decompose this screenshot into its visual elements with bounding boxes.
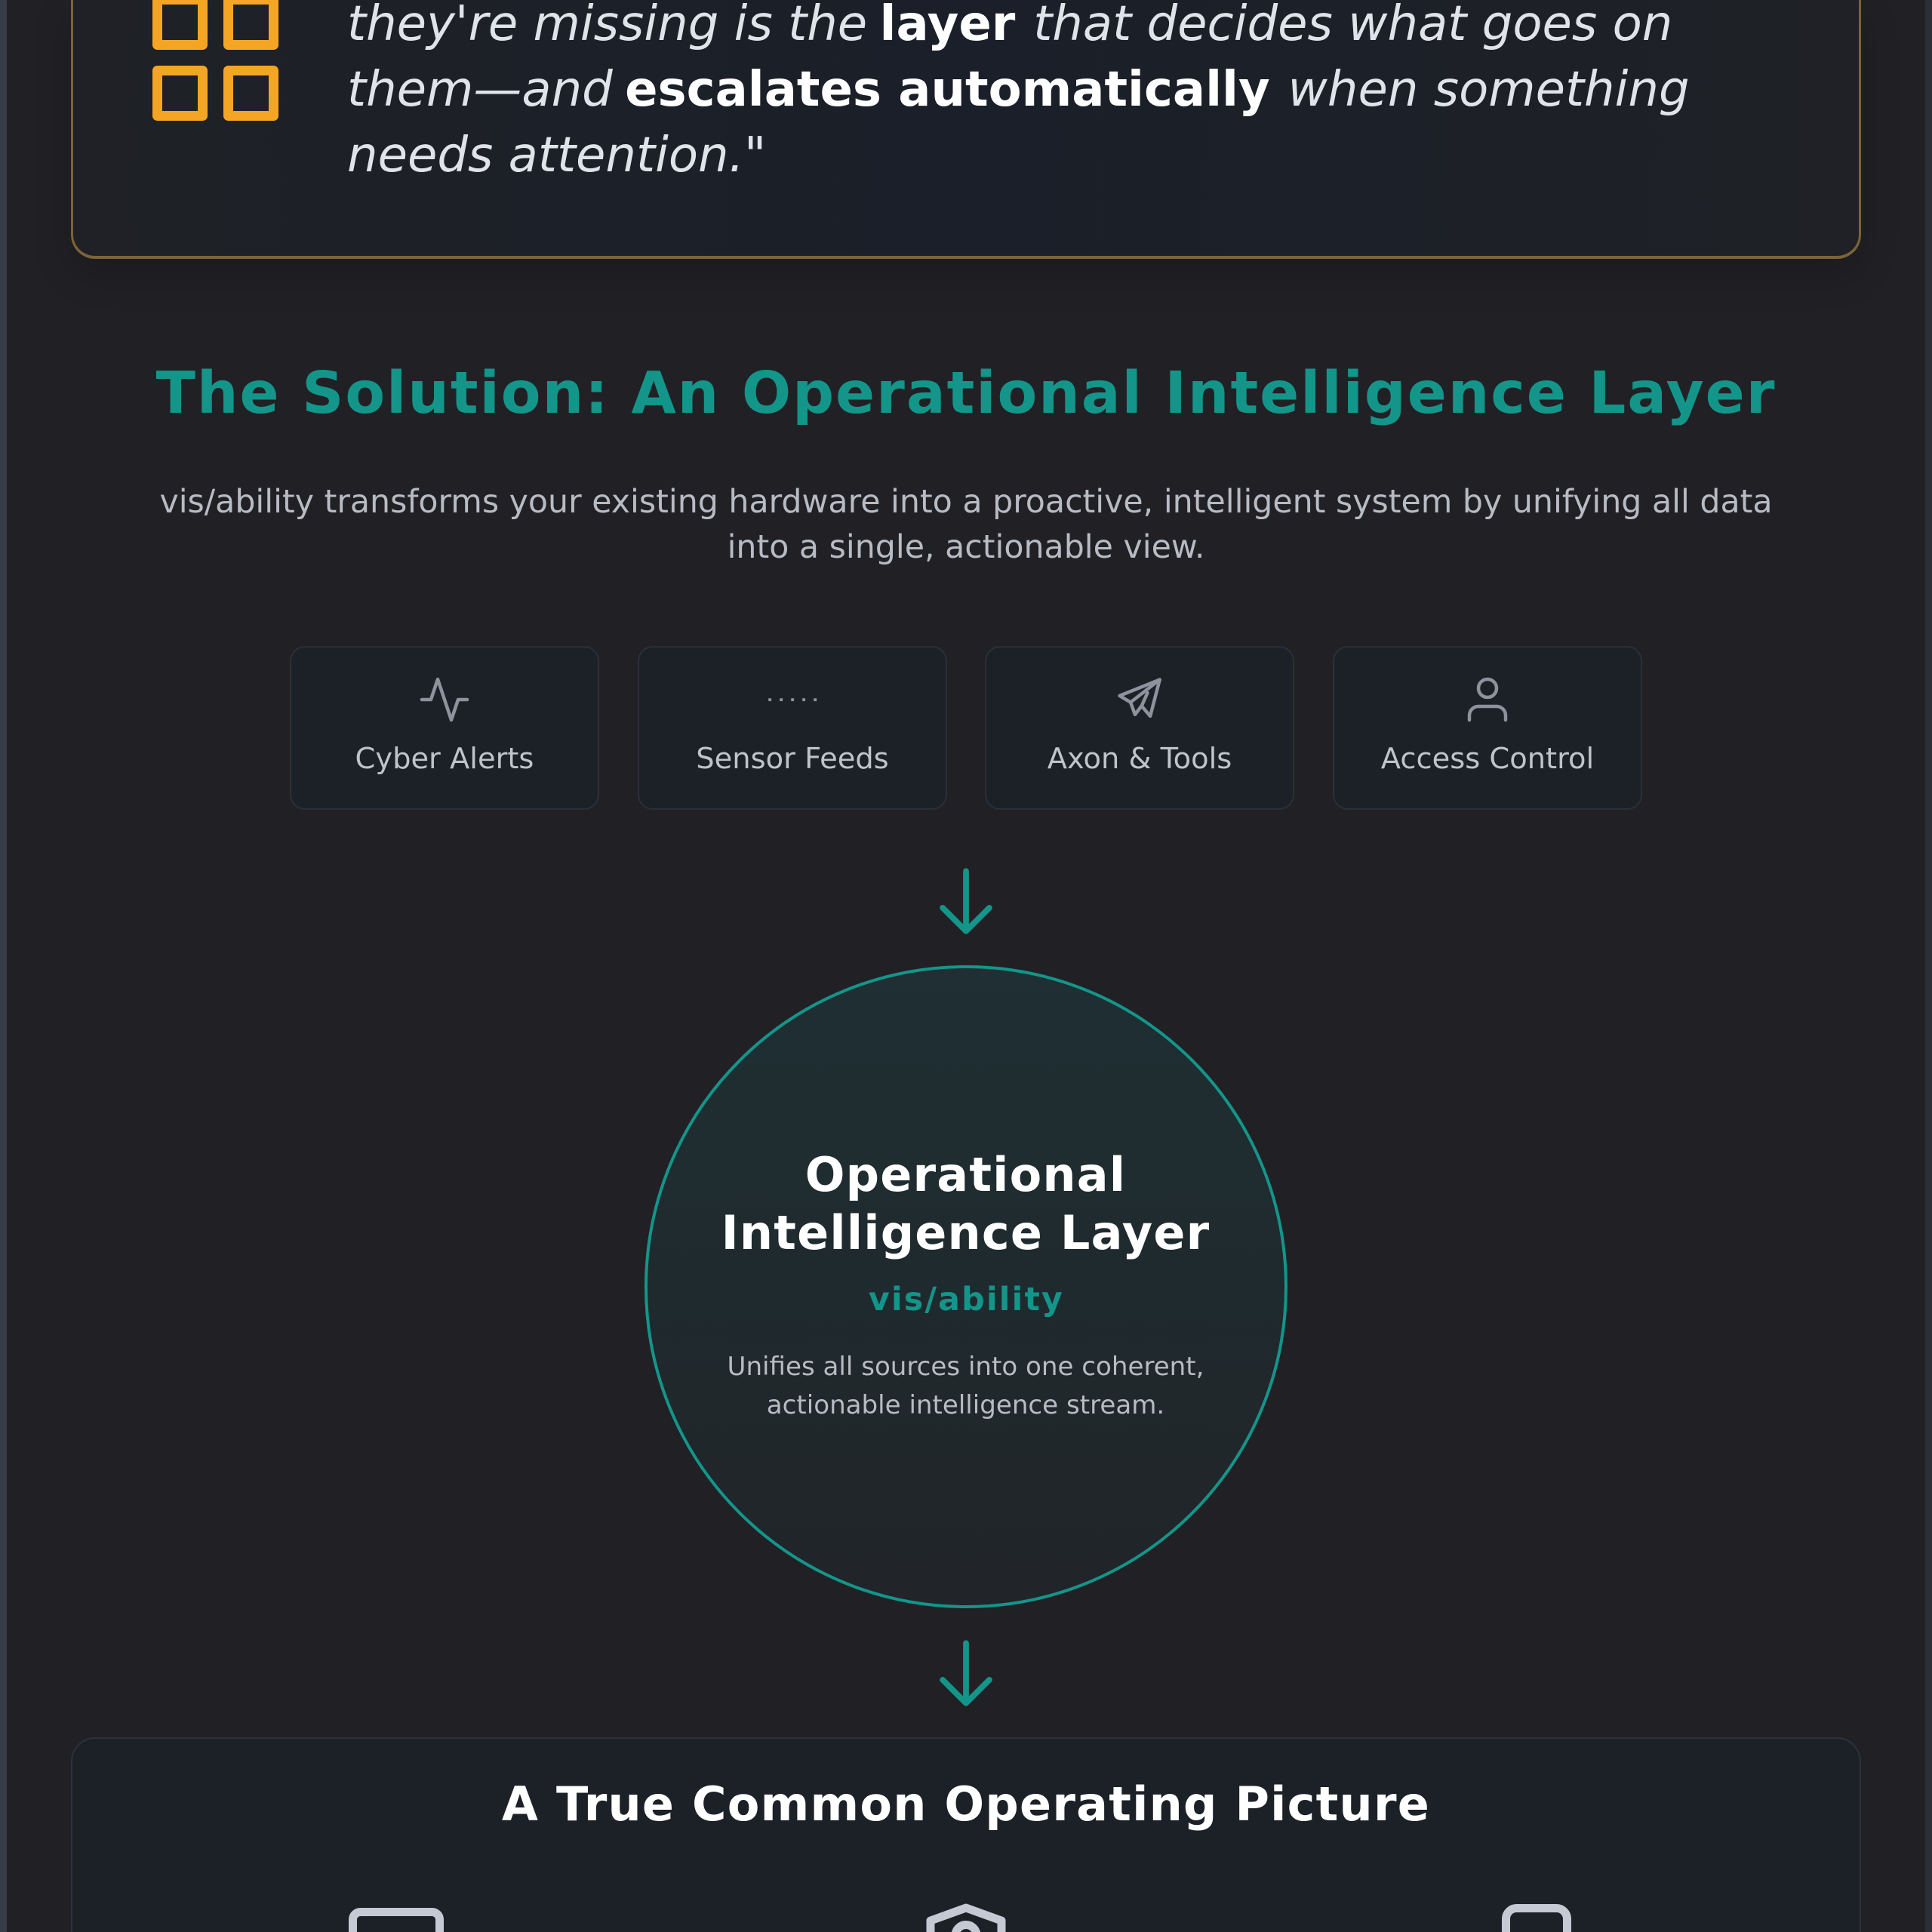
card: axon and tools xyxy=(985,646,1294,810)
heading: circle title xyxy=(721,1147,1210,1260)
icon: shield xyxy=(927,1903,1005,1932)
text block: circle description: Unifies all sources into one coherent, xyxy=(728,1352,1204,1382)
text block: intro: vis/ability transforms your existing hardware into a proactive, intelligent system by unifying all data xyxy=(159,483,1773,521)
icon: monitor xyxy=(349,1908,444,1932)
label: sensor feeds: Sensor Feeds xyxy=(696,741,889,776)
card: sensor feeds xyxy=(638,646,947,810)
label: axon and tools: Axon & Tools xyxy=(1048,741,1232,776)
heading: common operating picture: A True Common Operating Picture xyxy=(502,1777,1430,1832)
text block: quote xyxy=(347,0,1690,183)
arrow: out of circle xyxy=(940,1640,992,1706)
card: access control xyxy=(1333,646,1642,810)
label: cyber alerts: Cyber Alerts xyxy=(355,741,534,776)
left edge strip xyxy=(0,0,7,1932)
icon: paper plane xyxy=(1118,678,1161,718)
label: access control: Access Control xyxy=(1381,741,1594,776)
text block: quote: them—and escalates automatically when something xyxy=(347,62,1690,118)
text block: circle description xyxy=(728,1352,1204,1420)
label: vis/ability: vis/ability xyxy=(869,1280,1064,1318)
icon: activity pulse xyxy=(420,678,469,721)
icon: user xyxy=(1467,678,1508,721)
text block: intro xyxy=(159,483,1773,566)
panel: operational intelligence circle xyxy=(645,965,1287,1608)
text block: quote: needs attention." xyxy=(347,128,766,183)
icon: dots xyxy=(768,698,817,702)
panel: quote callout xyxy=(71,0,1861,259)
text block: circle description: actionable intelligence stream. xyxy=(767,1390,1164,1420)
card: cyber alerts xyxy=(290,646,599,810)
heading: circle title: Operational xyxy=(805,1147,1126,1202)
icon: phone xyxy=(1502,1904,1571,1932)
panel: common operating picture xyxy=(71,1737,1861,1932)
heading: solution title: The Solution: An Operational Intelligence Layer xyxy=(156,360,1776,427)
icon: orange grid xyxy=(152,0,278,121)
arrow: into circle xyxy=(940,868,992,934)
heading: circle title: Intelligence Layer xyxy=(721,1205,1210,1260)
right edge strip xyxy=(1925,0,1932,1932)
text block: intro: into a single, actionable view. xyxy=(728,528,1204,566)
